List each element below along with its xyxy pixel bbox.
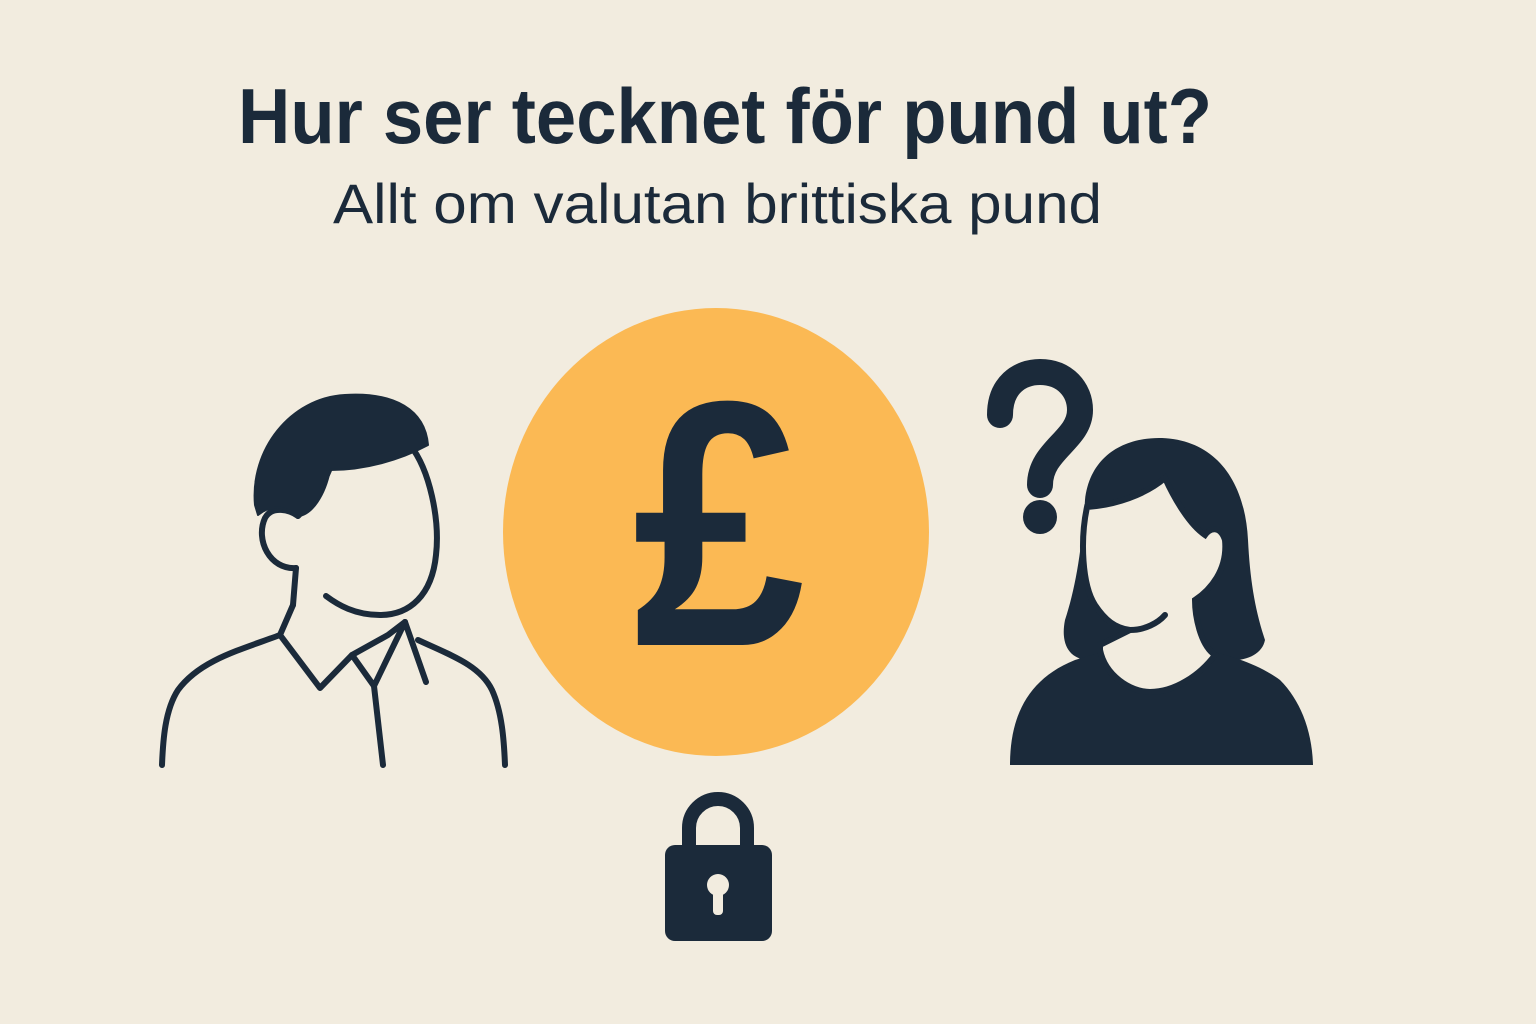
icon: lock bbox=[665, 799, 772, 941]
pound coin: £ bbox=[633, 329, 805, 720]
man figure bbox=[162, 395, 505, 765]
subtitle: Allt om valutan brittiska pund bbox=[333, 172, 1102, 235]
woman figure bbox=[1010, 438, 1313, 765]
pound coin bbox=[503, 308, 929, 756]
icon: question mark bbox=[1000, 372, 1080, 534]
title: Hur ser tecknet för pund ut? bbox=[238, 72, 1212, 160]
